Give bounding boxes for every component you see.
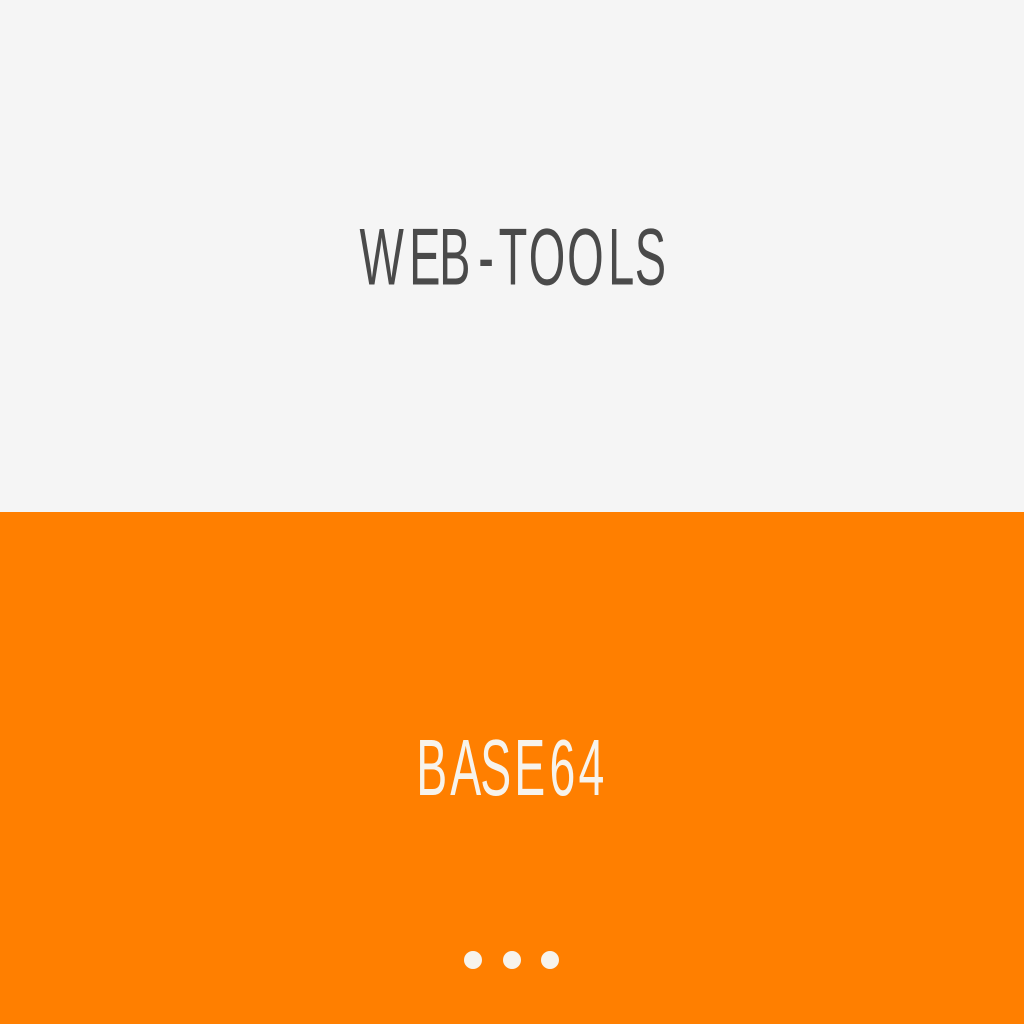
icon: three pagination dots [464, 951, 559, 969]
panel: top light background [0, 0, 1024, 512]
heading: BASE64: BASE64 [416, 723, 604, 812]
heading: WEB-TOOLS: WEB-TOOLS [359, 212, 666, 303]
panel: bottom orange background [0, 512, 1024, 1024]
